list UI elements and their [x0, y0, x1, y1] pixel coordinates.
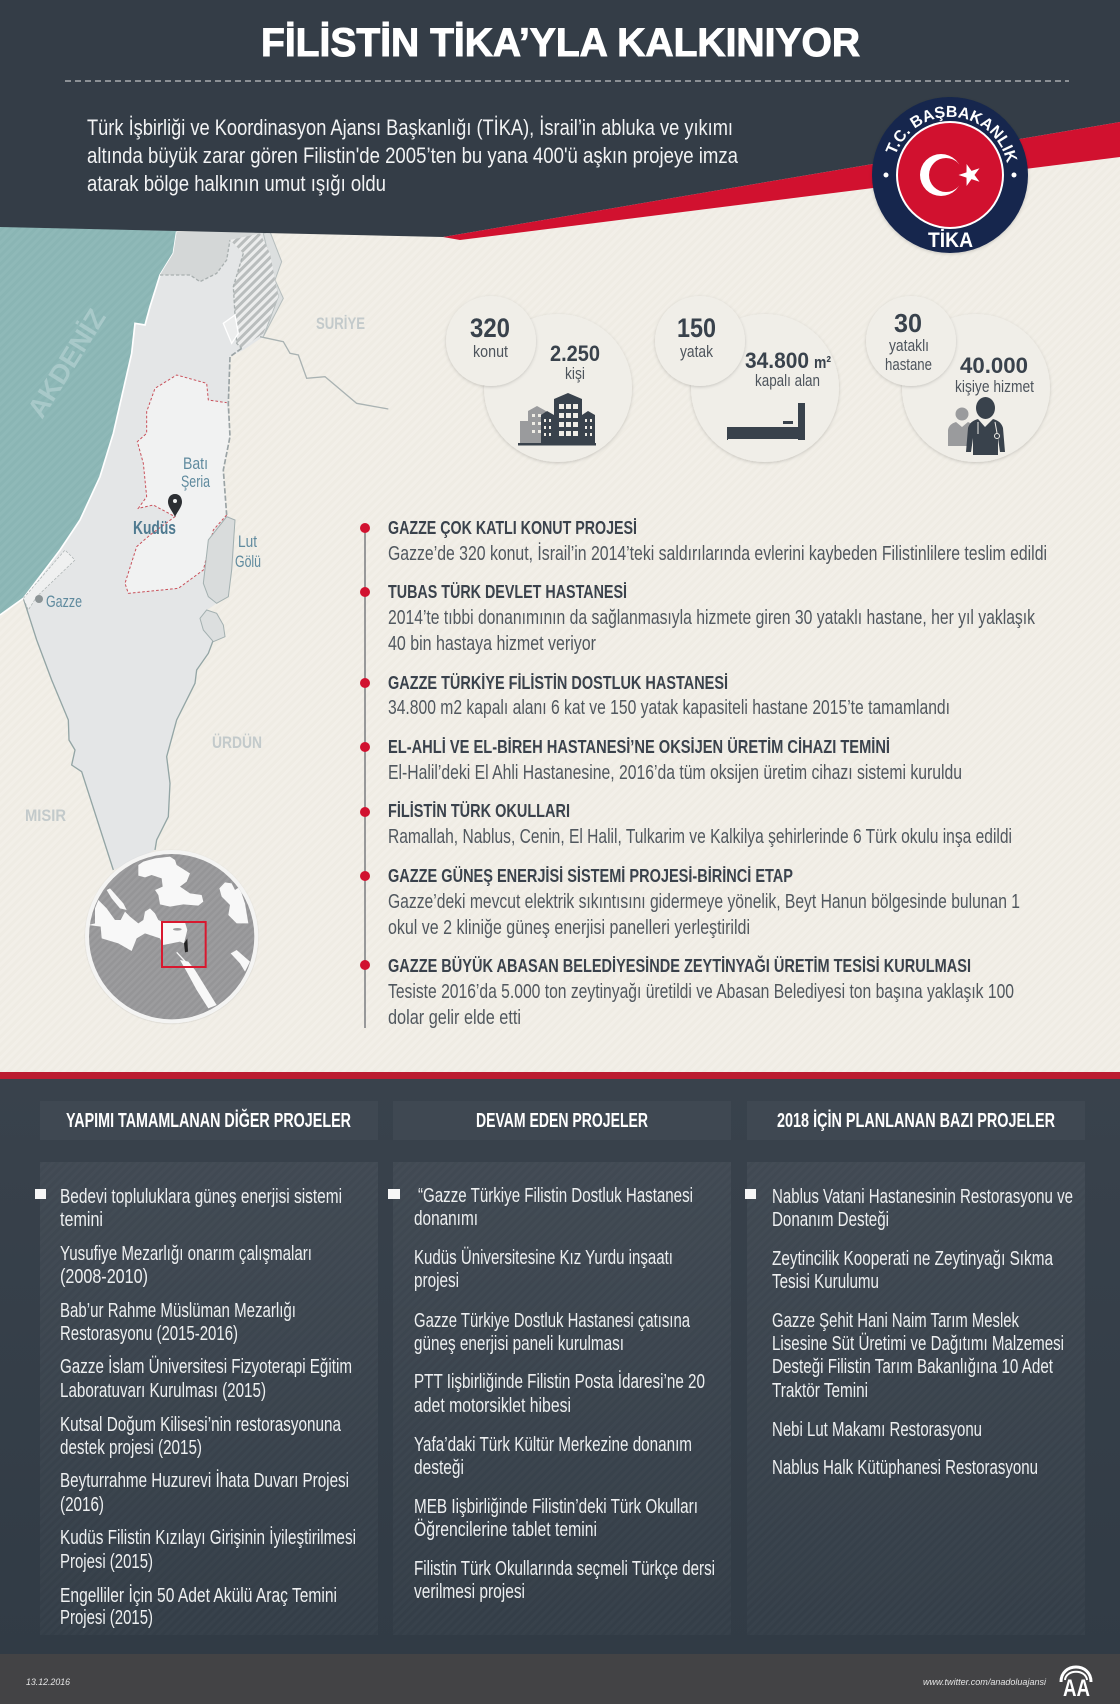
column panel: Filistin Türk Okullarında seçmeli Türkçe dersi	[414, 1558, 715, 1580]
logo: Anadolu Ajansı	[1061, 1667, 1091, 1702]
label: Batı Şeria: Şeria	[181, 472, 210, 491]
Gaza strip	[23, 550, 75, 610]
circle: 150 yatak	[655, 296, 745, 386]
circle: 30 yataklı hastane	[866, 296, 956, 386]
footer	[0, 1654, 1120, 1704]
project item: Gazze çok katlı konut: GAZZE ÇOK KATLI KONUT PROJESİ	[388, 518, 637, 538]
Golan hatching	[230, 233, 278, 348]
project item: Tubas hastanesi: TUBAS TÜRK DEVLET HASTANESİ	[388, 582, 627, 602]
label: Gazze: Gazze	[46, 592, 82, 611]
column panel: güneş enerjisi paneli kurulması	[414, 1333, 624, 1355]
Lebanon border	[160, 240, 230, 282]
column panel: Bab’ur Rahme Müslüman Mezarlığı	[60, 1300, 296, 1322]
circle: 34.800 m2 kapalı alan: kapalı alan	[755, 371, 820, 390]
bottom dark section	[0, 1072, 1120, 1654]
icon: buildings	[518, 393, 596, 446]
stat group: hospital area	[655, 296, 839, 462]
intro text: altında büyük zarar gören Filistin'de 2005’ten bu yana 400'ü aşkın projeye imza	[87, 143, 739, 168]
column header	[747, 1101, 1085, 1140]
circle: 30 yataklı hastane: yataklı	[889, 336, 929, 355]
column header: DEVAM EDEN PROJELER	[476, 1110, 648, 1132]
project item: Türk okulları	[360, 801, 1012, 848]
column panel: Tesisi Kurulumu	[772, 1271, 879, 1293]
project item: güneş enerjisi: GAZZE GÜNEŞ ENERJİSİ SİSTEMİ PROJESİ-BİRİNCİ ETAP	[388, 866, 793, 886]
stat group: Tubas hospital	[866, 296, 1050, 462]
column panel: (2016)	[60, 1494, 104, 1516]
Golan border	[233, 253, 243, 348]
project item: zeytinyağı tesisi: dolar gelir elde etti	[388, 1007, 521, 1029]
column panel: Nablus Halk Kütüphanesi Restorasyonu	[772, 1457, 1038, 1479]
label: Suriye: SURİYE	[316, 314, 365, 333]
circle: 34.800 m2 kapalı alan	[691, 314, 839, 462]
circle: 150 yatak: yatak	[680, 342, 713, 361]
column: completed projects	[35, 1101, 378, 1635]
project item: Tubas hastanesi	[360, 582, 1036, 655]
intro text: Türk İşbirliği ve Koordinasyon Ajansı Başkanlığı (TİKA), İsrail’in abluka ve yıkımı	[87, 115, 733, 140]
project item: Dostluk hastanesi	[360, 673, 950, 719]
column panel: “Gazze Türkiye Filistin Dostluk Hastanesi	[418, 1185, 693, 1207]
label: Ürdün: ÜRDÜN	[212, 733, 262, 752]
logo: Anadolu Ajansı: AA	[1063, 1675, 1090, 1702]
east border dashed	[223, 348, 242, 515]
project item: güneş enerjisi	[360, 866, 1020, 939]
icon: bed	[727, 403, 805, 440]
circle: 30 yataklı hastane: hastane	[885, 355, 932, 374]
icon: doctor and patient	[948, 397, 1005, 455]
column panel: verilmesi projesi	[414, 1581, 525, 1603]
column panel: Nebi Lut Makamı Restorasyonu	[772, 1419, 982, 1441]
circle: 34.800 m2 kapalı alan: 34.800	[745, 348, 809, 373]
intro text	[87, 115, 739, 196]
column: projects planned for 2018	[745, 1101, 1085, 1635]
circle: 40.000 kişiye hizmet: kişiye hizmet	[955, 377, 1034, 396]
salt ponds	[200, 610, 225, 642]
label: Batı Şeria	[181, 454, 210, 491]
column panel: PTT Iişbirliğinde Filistin Posta İdaresi’ne 20	[414, 1370, 705, 1393]
Dead Sea	[203, 517, 235, 603]
sea: Mediterranean	[0, 220, 177, 615]
column panel: Restorasyonu (2015-2016)	[60, 1323, 238, 1345]
column panel: Gazze İslam Üniversitesi Fizyoterapi Eğitim	[60, 1355, 352, 1378]
circle: 150 yatak: 150	[677, 313, 716, 343]
column panel: temini	[60, 1209, 103, 1231]
red diagonal stripe	[443, 122, 1120, 240]
column panel: Kudüs Üniversitesine Kız Yurdu inşaatı	[414, 1247, 673, 1269]
map of Palestine and surroundings	[0, 220, 388, 870]
column panel	[745, 1162, 1085, 1635]
circle: 320 konut: 320	[470, 313, 510, 343]
Egypt border	[23, 598, 113, 870]
intro text: atarak bölge halkının umut ışığı oldu	[87, 171, 386, 196]
column panel: donanımı	[414, 1208, 478, 1230]
stat group: housing	[446, 296, 632, 462]
circle: 34.800 m2 kapalı alan: m²	[814, 353, 831, 372]
header band	[0, 0, 1120, 240]
project timeline	[360, 518, 1047, 1029]
project item: Dostluk hastanesi: GAZZE TÜRKİYE FİLİSTİN DOSTLUK HASTANESİ	[388, 673, 728, 693]
column panel: Kudüs Filistin Kızılayı Girişinin İyileştirilmesi	[60, 1526, 356, 1549]
column panel: adet motorsiklet hibesi	[414, 1395, 571, 1417]
project item: oksijen cihazı	[360, 737, 962, 784]
Lebanon area	[160, 232, 270, 282]
land area	[23, 232, 283, 870]
label: Lut Gölü: Gölü	[235, 552, 261, 571]
column panel: Yafa’daki Türk Kültür Merkezine donanım	[414, 1434, 692, 1456]
circle: 2.250 kişi: 2.250	[550, 341, 600, 366]
date: 13.12.2016	[26, 1677, 71, 1688]
column panel: Traktör Temini	[772, 1380, 868, 1402]
column panel	[388, 1162, 731, 1635]
label: Lut Gölü: Lut	[238, 532, 257, 551]
Jordan south border	[155, 640, 213, 850]
column header	[40, 1101, 378, 1140]
north east strip	[263, 232, 283, 337]
column panel: Bedevi topluluklara güneş enerjisi sistemi	[60, 1186, 342, 1208]
logo: T.C. Başbakanlık TİKA: TİKA	[928, 229, 973, 252]
logo: T.C. Başbakanlık TİKA	[871, 97, 1030, 256]
Syria Jordan border	[260, 337, 388, 409]
column panel: Gazze Şehit Hani Naim Tarım Meslek	[772, 1310, 1020, 1332]
column header: YAPIMI TAMAMLANAN DİĞER PROJELER	[66, 1108, 351, 1132]
circle: 30 yataklı hastane: 30	[894, 308, 922, 338]
project item: oksijen cihazı: EL-AHLİ VE EL-BİREH HASTANESİ’NE OKSİJEN ÜRETİM CİHAZI TEMİNİ	[388, 737, 890, 757]
label: Akdeniz: AKDENİZ	[22, 304, 112, 423]
column panel: projesi	[414, 1270, 459, 1292]
label: Gazze	[35, 592, 82, 611]
column panel: desteği	[414, 1457, 464, 1479]
column panel: Engelliler İçin 50 Adet Akülü Araç Temini	[60, 1584, 337, 1607]
circle: 320 konut	[446, 296, 536, 386]
project item: oksijen cihazı: El-Halil’deki El Ahli Hastanesine, 2016’da tüm oksijen üretim cihazı sistemi kuruldu	[388, 762, 962, 784]
project item: Tubas hastanesi: 40 bin hastaya hizmet veriyor	[388, 633, 596, 655]
column panel: MEB Iişbirliğinde Filistin’deki Türk Okulları	[414, 1496, 698, 1518]
project item: güneş enerjisi: okul ve 2 kliniğe güneş enerjisi panelleri yerleştirildi	[388, 917, 750, 939]
coastline	[0, 232, 177, 615]
circle: 2.250 kişi	[484, 314, 632, 462]
inset globe	[85, 850, 258, 1023]
West Bank area	[125, 375, 230, 593]
column header	[393, 1101, 731, 1140]
project item: Türk okulları: FİLİSTİN TÜRK OKULLARI	[388, 801, 570, 821]
label: Batı Şeria: Batı	[183, 454, 208, 473]
circle: 40.000 kişiye hizmet	[902, 314, 1050, 462]
background	[0, 0, 1120, 1080]
column panel: Projesi (2015)	[60, 1551, 153, 1573]
label: Lut Gölü	[235, 532, 261, 571]
label: Mısır: MISIR	[25, 806, 66, 825]
column panel: Gazze Türkiye Dostluk Hastanesi çatısına	[414, 1310, 691, 1332]
label: Kudüs: Kudüs	[133, 518, 176, 538]
circle: 2.250 kişi: kişi	[565, 364, 585, 383]
column panel: (2008-2010)	[60, 1266, 148, 1288]
column panel: Yusufiye Mezarlığı onarım çalışmaları	[60, 1243, 312, 1265]
column panel: Donanım Desteği	[772, 1209, 889, 1231]
West Bank border	[125, 375, 227, 593]
column panel: destek projesi (2015)	[60, 1437, 202, 1459]
column panel	[35, 1162, 378, 1635]
project item: Gazze çok katlı konut	[360, 518, 1047, 565]
column: ongoing projects	[388, 1101, 731, 1635]
column panel: Beyturrahme Huzurevi İhata Duvarı Projesi	[60, 1469, 349, 1492]
Galilee sea	[223, 315, 238, 343]
circle: 40.000 kişiye hizmet: 40.000	[960, 353, 1028, 378]
project item: zeytinyağı tesisi: GAZZE BÜYÜK ABASAN BELEDİYESİNDE ZEYTİNYAĞI ÜRETİM TESİSİ KURULMASI	[388, 955, 971, 976]
twitter url: www.twitter.com/anadoluajansi	[923, 1677, 1047, 1688]
column panel: Kutsal Doğum Kilisesi’nin restorasyonuna	[60, 1414, 342, 1436]
project item: zeytinyağı tesisi	[360, 955, 1014, 1029]
column panel: Öğrencilerine tablet temini	[414, 1519, 597, 1541]
title: FİLİSTİN TİKA’YLA KALKINIYOR	[261, 21, 860, 65]
circle: 320 konut: konut	[473, 342, 508, 361]
column panel: Projesi (2015)	[60, 1607, 153, 1629]
icon: location pin	[168, 494, 182, 517]
column panel: Laboratuvarı Kurulması (2015)	[60, 1380, 266, 1402]
project item: Dostluk hastanesi: 34.800 m2 kapalı alanı 6 kat ve 150 yatak kapasiteli hastane 2015’te tamamlandı	[388, 697, 950, 719]
logo: T.C. Başbakanlık TİKA: T.C. BAŞBAKANLIK	[885, 106, 1018, 164]
